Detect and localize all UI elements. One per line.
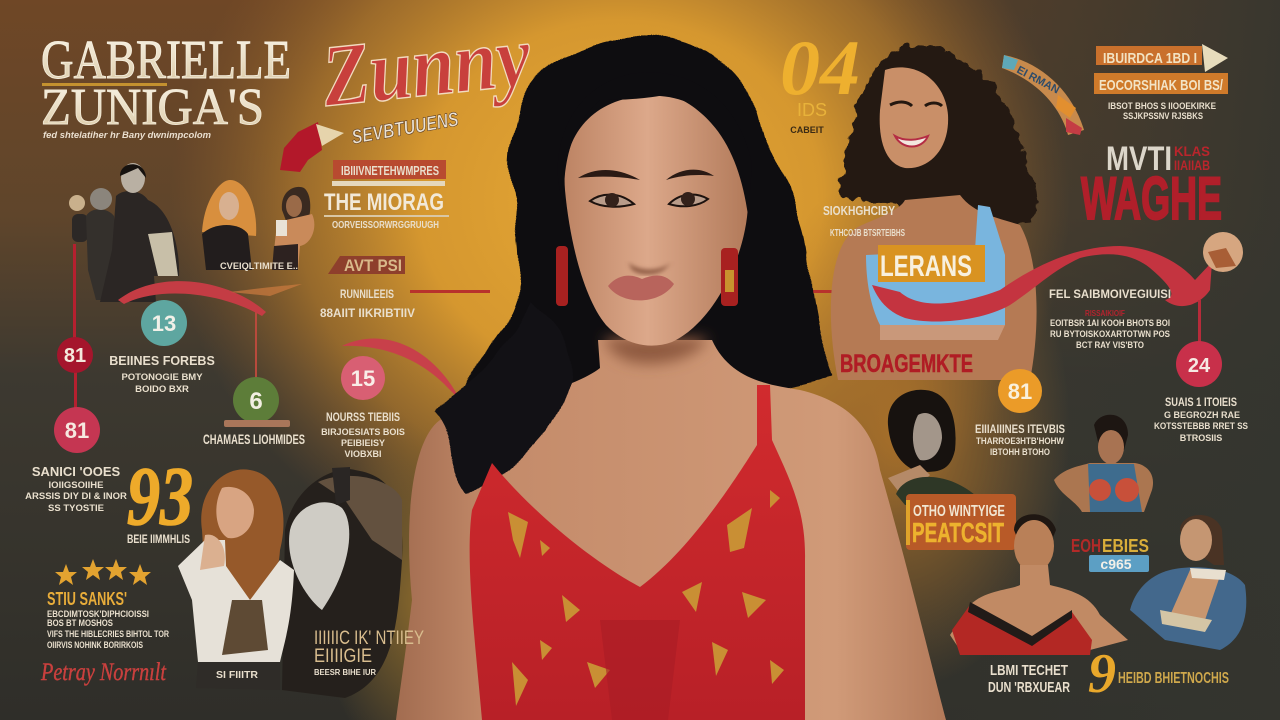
photo group: three figures in dark coats: [69, 163, 179, 302]
label: signmenoiby: [823, 203, 905, 239]
text: stiu sanks: VIFS THE HIBLECRIES BIHTOL TOR: [47, 629, 169, 639]
text: suais ifoeis: BTROSIIS: [1180, 433, 1222, 443]
heading: myti wache: [1081, 140, 1222, 232]
text: bennes forebs: BOIDO BXR: [135, 384, 189, 395]
stars: [55, 559, 151, 585]
text: nourss tiebis: VIOBXBI: [344, 449, 382, 459]
title: [41, 29, 291, 141]
text: fel saignoivegiuss: EOITBSR 1AI KOOH BHOTS BOI: [1050, 318, 1170, 328]
tag and caption: 88AIIT IIKRIBTIIV: [320, 306, 415, 320]
number 9 with caption: 9: [1088, 643, 1116, 705]
text: lbmi tecnet: LBMI TECHET: [990, 662, 1068, 679]
hair over left shoulder: [430, 300, 571, 492]
eye right: [669, 195, 708, 206]
photo: woman in denim jacket: [1130, 515, 1246, 650]
banner: peatcsit: [906, 494, 1016, 550]
brows: [578, 170, 640, 180]
title: ZUNIGA'S: [41, 79, 264, 136]
text: ebon ebries: [1071, 536, 1149, 572]
signature: Petray Norrnılt: [40, 659, 167, 686]
tag and caption: [320, 256, 415, 320]
banners: top right: EOCORSHIAK BOI BS/: [1099, 77, 1224, 94]
label: signmenoiby: KTHCOJB BTSRTEIBHS: [830, 228, 905, 239]
banner: the miorag: OORVEISSORWRGGRUUGH: [332, 220, 439, 231]
badge: 13: [141, 300, 187, 346]
text: lbmi tecnet: [988, 662, 1070, 696]
text: stiu sanks: [47, 589, 169, 650]
nose: [628, 262, 672, 274]
text: fel saignoivegiuss: RISSAIKIOIF: [1085, 309, 1125, 318]
text: nourss tiebis: NOURSS TIEBIIS: [326, 412, 400, 424]
text: poster caption: IIIIIIC IK' NTIIEY: [314, 628, 424, 649]
banner: lerans: LERANS: [880, 250, 972, 283]
text: eihaiines iteisis: EIIIAIIINES ITEVBIS: [975, 422, 1065, 436]
photo: short black haired woman: [888, 390, 976, 505]
photo: curly haired woman with mug: [220, 187, 314, 271]
text: chames lionhides: CHAMAES LIOHMIDES: [203, 431, 305, 447]
badge: 15: [341, 356, 385, 400]
title: GABRIELLE: [41, 29, 291, 90]
text: stiu sanks: STIU SANKS': [47, 589, 127, 609]
big number 04: CABEIT: [790, 125, 824, 135]
sticker: curved colours: [1002, 55, 1084, 135]
text: sanici does: SS TYOSTIE: [48, 503, 104, 514]
tag and caption: RUNNILEEIS: [340, 287, 394, 301]
text: bennes forebs: POTONOGIE BMY: [121, 372, 203, 383]
hair fringe: [558, 72, 752, 215]
banner: peatcsit: OTHO WINTYIGE: [913, 503, 1005, 520]
badge: 24: [1176, 341, 1222, 387]
label: signmenoiby: SIOKHGHCIBY: [823, 203, 895, 218]
photo: woman in red strapless top: [950, 514, 1128, 655]
script heading: Zunny: [317, 8, 536, 126]
number 9 with caption: HEIBD BHIETNOCHIS: [1118, 670, 1229, 687]
badge: 24: 24: [1188, 355, 1211, 377]
banner: the miorag: [324, 160, 449, 231]
text: poster caption: EIIIIGIE: [314, 646, 372, 667]
arrow: red swoosh: [872, 246, 1212, 345]
heading: myti wache: KLAS: [1174, 143, 1210, 159]
text: lbmi tecnet: DUN 'RBXUEAR: [988, 679, 1070, 696]
earrings: [556, 246, 568, 306]
text: poster caption: [314, 628, 424, 677]
face: [565, 96, 748, 346]
badge: 15: 15: [351, 366, 375, 391]
text: suais ifoeis: KOTSSTEBBB RRET SS: [1154, 421, 1248, 431]
banners: top right: SSJKPSSNV RJSBKS: [1123, 111, 1203, 121]
text: sanici does: [25, 464, 127, 514]
text: fel saignoivegiuss: FEL SAIBMOIVEGIUISI: [1049, 287, 1171, 301]
text: stiu sanks: BOS BT MOSHOS: [47, 618, 113, 628]
text: sanici does: SANICI 'OOES: [32, 464, 120, 479]
text: eihaiines iteisis: THARROE3HTB'HOHW: [976, 436, 1064, 446]
text: poster caption: BEESR BIHE IUR: [314, 668, 376, 677]
lips: [608, 275, 674, 300]
big number 04: 04: [780, 24, 860, 111]
body: [396, 340, 946, 720]
text: stiu sanks: OIIRVIS NOHINK BORIRKOIS: [47, 640, 143, 650]
photo: brunette woman in white top: [178, 469, 294, 690]
banner: the miorag: THE MIORAG: [324, 189, 444, 216]
big number 93: 93: [127, 450, 193, 543]
big number 04: IDS: [797, 100, 827, 120]
text: eihaiines iteisis: [975, 422, 1065, 457]
badge: 6: [224, 377, 290, 427]
banner: peatcsit: PEATCSIT: [912, 517, 1004, 548]
photo: curly haired woman in blue top: [831, 46, 1037, 380]
script heading: [280, 8, 536, 172]
badge: 81 orange: 81: [1008, 379, 1032, 404]
photo: curly haired woman with mug: CVEIQLTIMITE E..: [220, 261, 298, 271]
heading: myti wache: MVTI: [1106, 140, 1172, 178]
text: fel saignoivegiuss: BCT RAY VIS'BTO: [1076, 340, 1144, 350]
central figure: [396, 36, 946, 720]
text: nourss tiebis: BIRJOESIATS BOIS: [321, 427, 405, 437]
text: ebon ebries: c965: [1100, 556, 1132, 572]
text: ebon ebries: EBIES: [1102, 536, 1149, 556]
text: bennes forebs: [109, 354, 215, 395]
dress embroidery: [508, 490, 784, 706]
number 9 with caption: [1088, 643, 1229, 705]
banners: top right: IBUIRDCA 1BD I: [1103, 50, 1197, 67]
eye left: [590, 195, 634, 207]
title: fed shtelatiher hr Bany dwnimpcolom: [43, 130, 212, 141]
badge: 81 dark: [57, 337, 93, 373]
badge: 81 orange: [998, 369, 1042, 413]
text: nourss tiebis: [321, 412, 405, 459]
back hair: [430, 36, 832, 492]
photo: brunette woman in white top: SI FIIITR: [216, 670, 259, 681]
neck shadow: [604, 338, 708, 364]
badge: 6: 6: [249, 388, 263, 415]
big number 93: BEIE IIMMHLIS: [127, 532, 190, 546]
sticker: curved colours: EI RMAN: [1015, 64, 1061, 96]
heading: myti wache: IIAIIAB: [1174, 157, 1210, 173]
badge: 81 pink: [54, 407, 100, 453]
icon: round portrait: [1203, 232, 1243, 272]
banners: top right: IBSOT BHOS S IIOOEKIRKE: [1108, 101, 1216, 111]
text: eihaiines iteisis: IBTOHH BTOHO: [990, 447, 1050, 457]
text: bennes forebs: BEIINES FOREBS: [109, 354, 215, 368]
text: broagemkte: BROAGEMKTE: [840, 350, 973, 378]
badge: 13: 13: [152, 311, 176, 336]
photo: dark furred figure: [282, 467, 402, 698]
text: sanici does: ARSSIS DIY DI & INOR: [25, 491, 127, 502]
badge: 81 pink: 81: [65, 418, 89, 443]
script heading: SEVBTUUENS: [350, 108, 461, 149]
timeline left: [73, 244, 855, 412]
dress: [470, 385, 805, 720]
badge: 81 dark: 81: [64, 345, 86, 367]
text: nourss tiebis: PEIBIEISY: [341, 438, 385, 448]
text: stiu sanks: EBCDIMTOSK'DIPHCIOISSI: [47, 609, 149, 619]
text: suais ifoeis: G BEGROZH RAE: [1164, 410, 1240, 420]
photo: orange haired girl: [202, 180, 256, 270]
tag and caption: AVT PSI: [344, 256, 402, 275]
text: suais ifoeis: SUAIS 1 ITOIEIS: [1165, 395, 1237, 409]
banner: the miorag: IBIIIVNETEHWMPRES: [341, 163, 439, 178]
text: sanici does: IOIIGSOIIHE: [49, 480, 103, 491]
text: ebon ebries: EOH: [1071, 536, 1101, 556]
text: fel saignoivegiuss: RU BYTOISKOXARTOTWN POS: [1050, 329, 1170, 339]
banners: top right: [1094, 44, 1228, 121]
photo: boy with boxing gloves: [1054, 415, 1153, 512]
text: suais ifoeis: [1154, 395, 1248, 443]
text: fel saignoivegiuss: [1049, 287, 1171, 350]
